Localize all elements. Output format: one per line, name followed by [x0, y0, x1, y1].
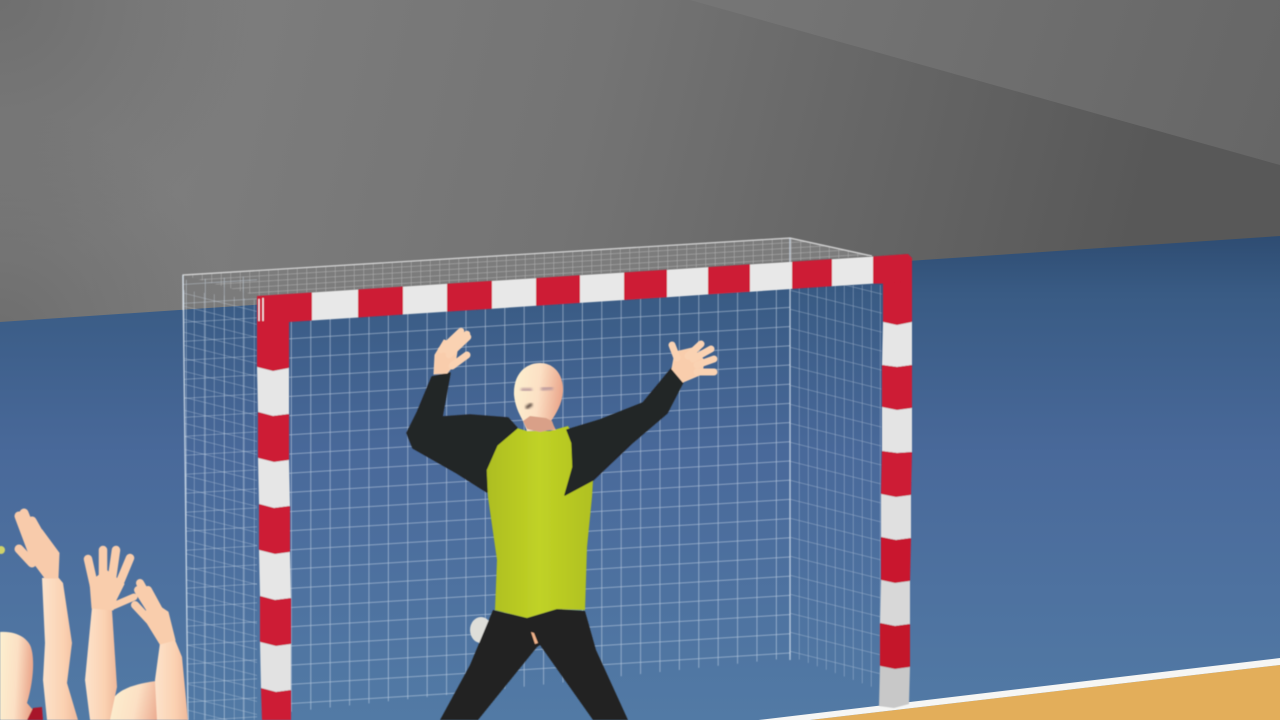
goal frame	[257, 254, 912, 720]
left hand	[434, 331, 468, 374]
foreground defenders	[0, 513, 188, 720]
crotch detail	[531, 632, 538, 644]
goal net	[183, 238, 882, 720]
left arm	[407, 373, 517, 492]
defender head centre	[110, 681, 165, 720]
left post	[257, 320, 291, 720]
small ball at left edge	[0, 546, 5, 554]
arm 3	[135, 583, 188, 720]
right hand	[672, 344, 714, 382]
arm 2	[85, 550, 134, 720]
defender head left	[0, 632, 33, 720]
defender jersey	[27, 707, 43, 720]
net: back	[289, 287, 790, 712]
legs	[440, 609, 628, 720]
goalkeeper	[407, 331, 714, 720]
net: left side	[183, 275, 257, 720]
crossbar	[257, 254, 912, 322]
right post	[879, 279, 912, 708]
jersey	[486, 426, 593, 618]
wall	[0, 236, 1280, 720]
right arm	[565, 368, 683, 495]
ball behind keeper	[470, 617, 492, 643]
ceiling	[0, 0, 1280, 325]
floor	[750, 658, 1280, 720]
net: top	[183, 238, 872, 310]
arm 1	[19, 513, 78, 720]
head	[514, 363, 563, 432]
net: right side	[790, 238, 882, 690]
